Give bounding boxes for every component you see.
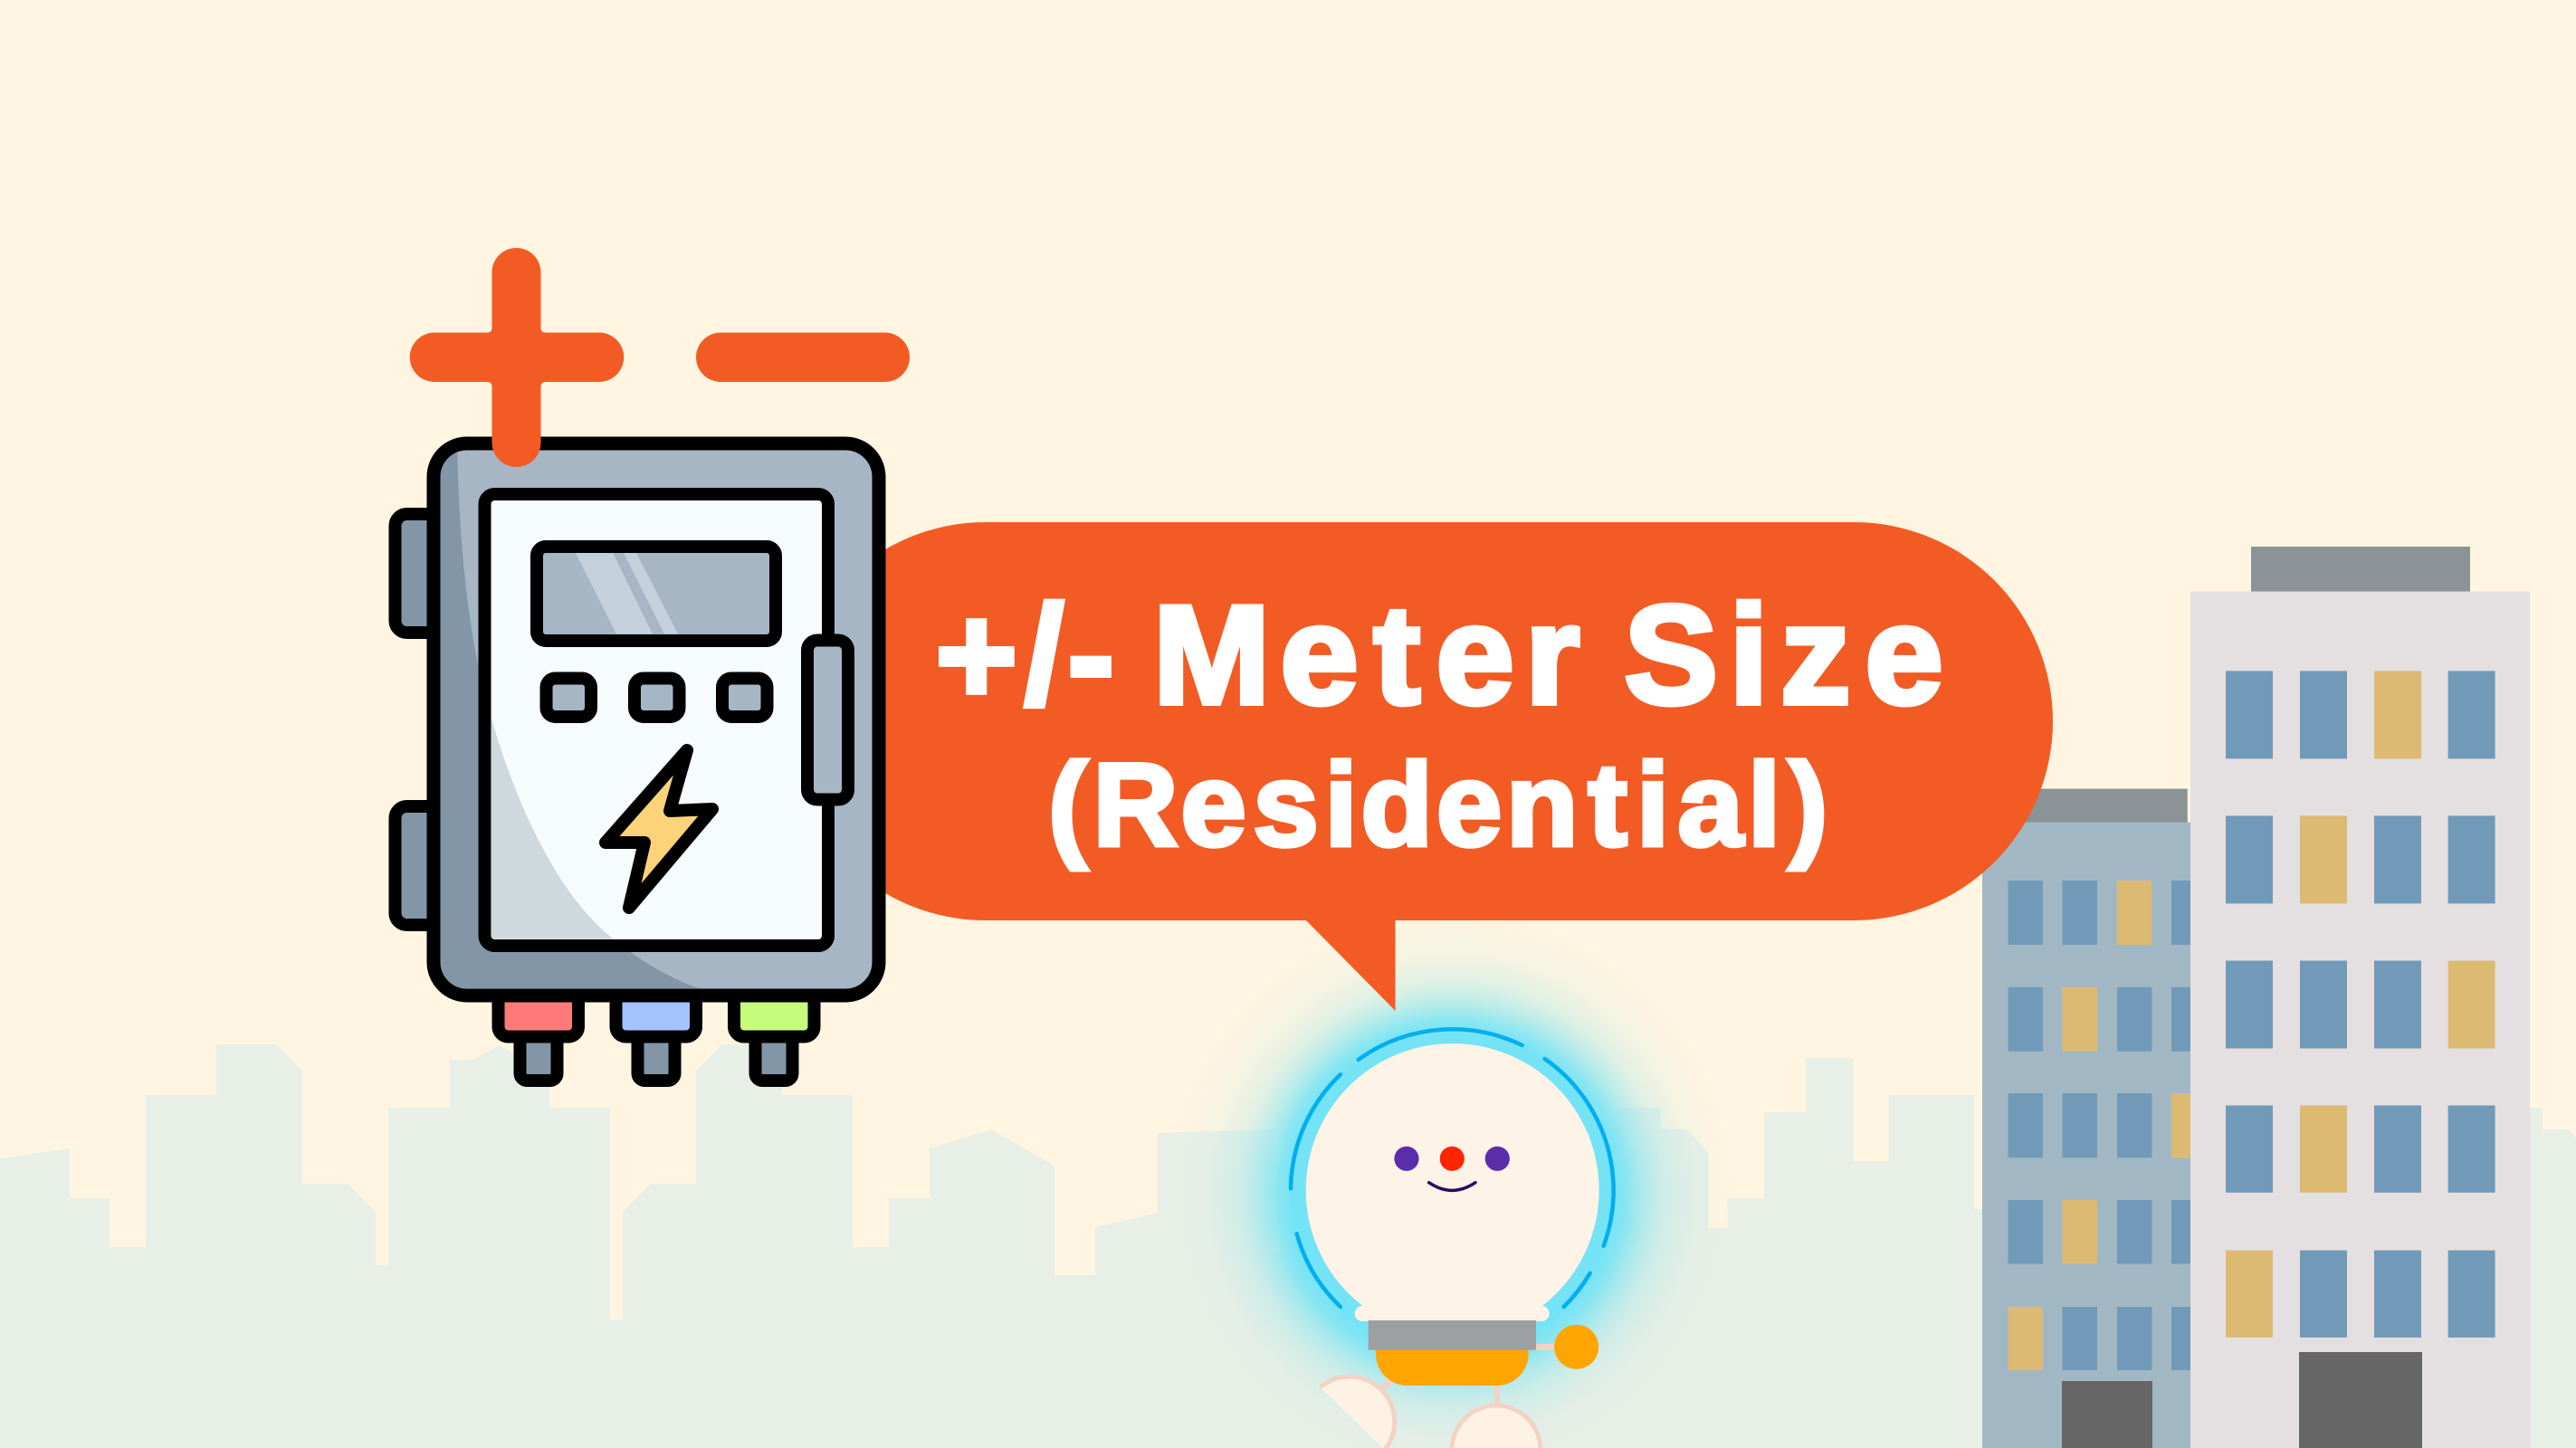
robot face bbox=[1394, 1147, 1510, 1190]
bulb neck flange bbox=[1355, 1306, 1550, 1321]
meter display bbox=[537, 547, 776, 641]
glow halo bbox=[1171, 914, 1732, 1448]
cable pins bbox=[520, 1023, 793, 1081]
dashed halo ring bbox=[1291, 1029, 1614, 1307]
icon: minus sign bbox=[696, 333, 910, 382]
meter buttons bbox=[547, 679, 768, 717]
coloured connectors bbox=[498, 986, 815, 1037]
bulb robot character bbox=[1171, 914, 1732, 1448]
left hinges bbox=[395, 514, 440, 925]
robot legs and feet bbox=[1320, 1377, 1541, 1448]
robot body bbox=[1376, 1344, 1529, 1386]
title: second line: (Residential) bbox=[1048, 738, 1827, 871]
icon: plus sign bbox=[410, 248, 624, 467]
icon: lightning bolt bbox=[606, 750, 712, 908]
door latch bbox=[807, 641, 848, 800]
bulb head bbox=[1306, 1043, 1599, 1337]
speech bubble with title bbox=[787, 522, 2053, 1011]
meter body bbox=[434, 443, 879, 996]
bulb base bbox=[1369, 1320, 1536, 1350]
icon: electric meter box bbox=[395, 443, 879, 1081]
building: blue mid-rise bbox=[1982, 789, 2192, 1448]
building: light tower bbox=[2190, 547, 2530, 1448]
title: first line: +/- Meter Size bbox=[936, 576, 1943, 733]
meter front panel bbox=[485, 494, 828, 946]
city skyline silhouette bbox=[0, 1044, 2576, 1448]
robot arm and hand bbox=[1530, 1325, 1598, 1369]
